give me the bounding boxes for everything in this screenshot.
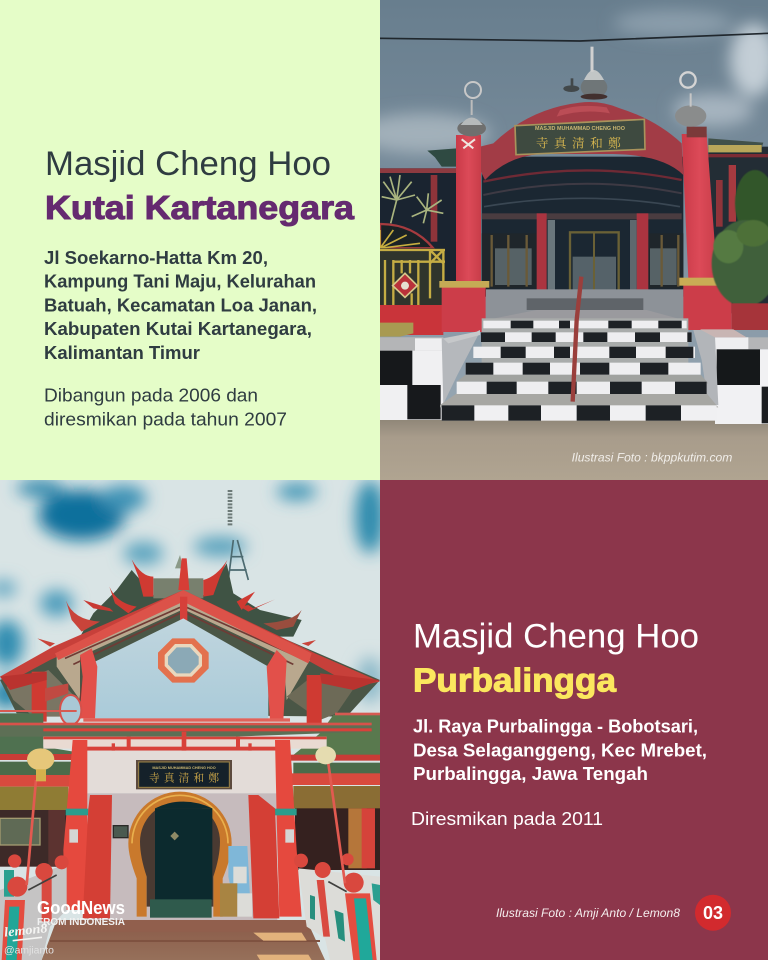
heading: Masjid Cheng Hoo: Masjid Cheng Hoo [413, 618, 699, 656]
logo: GoodNews from Indonesia [37, 898, 125, 928]
palm leaves [382, 175, 443, 223]
sign board: MASJID MUHAMMAD CHENG HOO [535, 126, 626, 132]
arch [480, 102, 683, 180]
photo credit: Ilustrasi Foto : bkppkutim.com [572, 451, 732, 465]
logo: GoodNews from Indonesia: GoodNews [37, 898, 125, 918]
left fence [0, 854, 69, 960]
construction dates [44, 385, 287, 430]
sign board [515, 119, 645, 155]
construction dates: diresmikan pada tahun 2007 [44, 409, 287, 430]
octagonal window [158, 638, 209, 683]
photo credit: Amji Anto: Ilustrasi Foto : Amji Anto / Lemon8 [496, 906, 680, 920]
page number badge [695, 895, 731, 931]
panel: Kutai Kartanegara text background [0, 0, 380, 480]
side checker right [693, 329, 768, 424]
inauguration date: Diresmikan pada 2011 [411, 808, 603, 829]
panel: Purbalingga text background [380, 480, 768, 960]
right fence [294, 853, 380, 960]
address: Purbalingga, Jawa Tengah [413, 763, 648, 784]
address: Jl. Raya Purbalingga - Bobotsari, [413, 716, 698, 737]
upper front wall with sign [87, 751, 277, 793]
right pillar [679, 127, 732, 330]
photo: Masjid Cheng Hoo Kutai Kartanegara [357, 0, 768, 480]
address: Kabupaten Kutai Kartanegara, [44, 318, 312, 339]
entrance canopy [0, 718, 372, 751]
photo: Masjid Cheng Hoo Purbalingga [0, 480, 385, 960]
lower green roofs [0, 710, 380, 787]
address: Jl Soekarno-Hatta Km 20, [44, 247, 268, 268]
stairs [42, 920, 325, 960]
lower front wall [87, 793, 277, 920]
keyhole doorway [128, 792, 232, 918]
ground [380, 419, 768, 480]
railing [573, 277, 581, 402]
lemon8 watermark: lemon8 [3, 920, 48, 940]
lanterns [27, 746, 345, 885]
side buildings [380, 168, 456, 281]
heading: Masjid Cheng Hoo: Masjid Cheng Hoo [45, 145, 331, 183]
lemon8 watermark: @amjianto [4, 945, 54, 956]
main gable roof [0, 590, 380, 723]
heading: Kutai Kartanegara: Kutai Kartanegara [45, 189, 355, 226]
lemon8 watermark [4, 924, 54, 956]
gate [380, 224, 433, 248]
stairs [440, 318, 718, 421]
address: Batuah, Kecamatan Loa Janan, [44, 294, 317, 315]
text block: Purbalingga [411, 618, 707, 829]
upper front wall with sign: 寺真清和鄭 [149, 771, 219, 786]
sign board: 寺真清和鄭 [536, 132, 621, 151]
address: Kalimantan Timur [44, 342, 200, 363]
left pillar [439, 135, 489, 332]
entrance pillars [63, 740, 302, 917]
upper roof tiers [37, 555, 316, 647]
logo: GoodNews from Indonesia: FROM INDONESIA [37, 917, 125, 928]
text block: Kutai Kartanegara [44, 145, 355, 430]
address [413, 716, 707, 784]
tree [712, 170, 768, 307]
information banner [220, 846, 252, 917]
heading: Purbalingga: Purbalingga [413, 662, 617, 699]
gable wall [95, 618, 268, 718]
porch interior [482, 157, 683, 297]
page number badge: 03 [703, 903, 723, 923]
side panels [0, 786, 380, 870]
address: Desa Selaganggeng, Kec Mrebet, [413, 739, 707, 760]
red wall panels [83, 795, 279, 918]
upper front wall with sign: MASJID MUHAMMAD CHENG HOO [152, 765, 216, 770]
antenna tower [228, 490, 248, 580]
domes and finials [457, 47, 706, 136]
side checker left [380, 330, 480, 420]
wall plaque [113, 826, 128, 838]
address: Kampung Tani Maju, Kelurahan [44, 271, 316, 292]
construction dates: Dibangun pada 2006 dan [44, 385, 258, 406]
porch floor [486, 289, 683, 321]
address [44, 247, 317, 363]
